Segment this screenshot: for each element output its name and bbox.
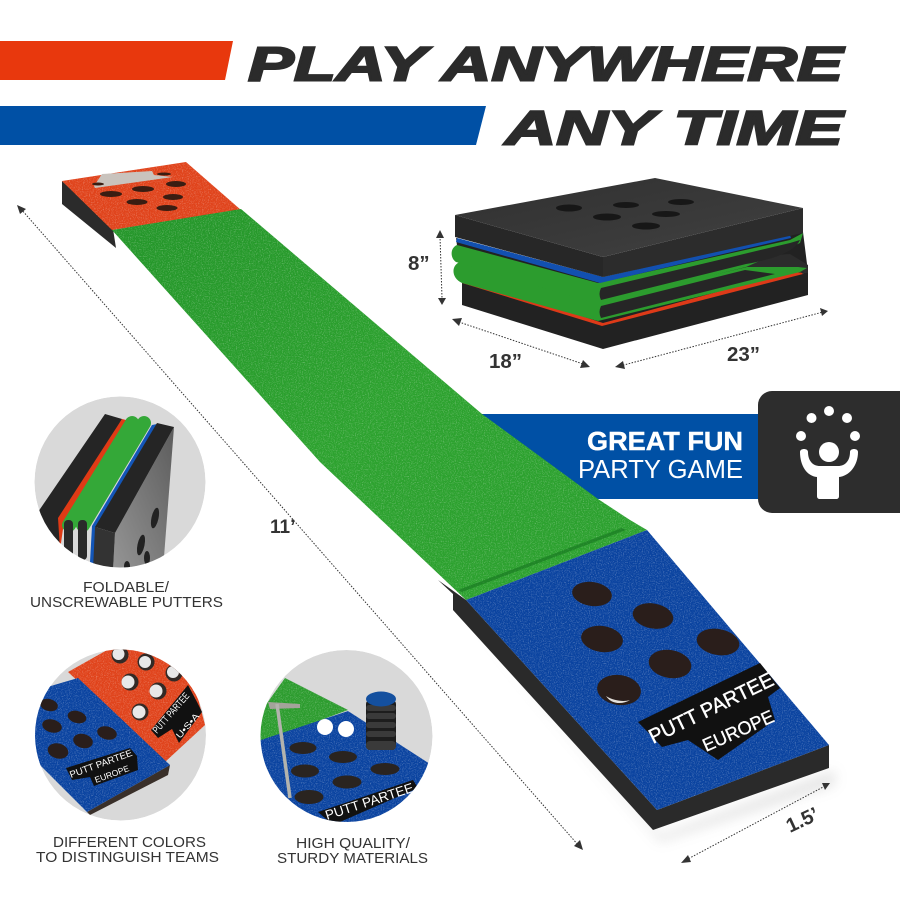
orange header bar [0,41,233,80]
circle photo: close-up with putter [255,650,436,830]
upper fold dark core [600,240,800,300]
top slab holes [556,199,694,230]
top slab surface [455,178,803,257]
dimension: 11 feet [17,205,583,850]
caption: TO DISTINGUISH TEAMS [36,850,219,866]
dimension: 1.5 feet: 1.5’ [783,803,822,838]
circle photo: red and blue ends: PUTT PARTEE [68,748,134,781]
red logo plate [151,685,202,743]
red layer [461,270,803,326]
circle photo: red and blue ends: EUROPE [93,763,131,785]
blue edge [87,765,170,815]
callout text [578,428,743,484]
caption [277,836,428,867]
fairway seam [458,528,626,592]
circle photo: red and blue ends: PUTT PARTEE [151,691,192,736]
dimension: 1.5 feet [681,783,830,863]
holes [290,742,400,804]
title line 2: ANY TIME [504,102,846,156]
top slab front [455,215,603,277]
feature: high quality [255,650,436,867]
dimension: 8 inches: 8” [408,252,430,275]
title [248,38,846,156]
feature: foldable [30,396,223,611]
dimension: 11 feet: 11’ [270,517,295,538]
black slab front [93,527,115,570]
golf balls [317,719,354,737]
blue end [466,530,829,810]
dark backing between layers [456,232,808,326]
circle photo: red and blue ends [35,650,206,820]
red end score label [94,171,173,188]
logo plate [318,780,418,825]
logo name: PUTT PARTEE [645,668,777,748]
caption [36,835,219,866]
red end holes [92,172,186,211]
feature: different colors [35,650,218,862]
logo region: EUROPE [699,706,777,756]
blue end holes [571,579,741,708]
black slab top edge [95,423,174,533]
blue logo plate [66,748,138,786]
icon: person juggling [796,406,860,499]
main putting mat [62,162,835,842]
blue end edge [453,593,829,830]
caption: DIFFERENT COLORS [53,835,206,851]
dark icon box [758,391,900,513]
mat shadow [465,615,835,842]
lower green fold [453,262,807,321]
blue banner [470,414,765,499]
gray slab face [113,427,174,570]
red end dark edge [62,181,116,248]
lower fold dark core [600,270,775,318]
white balls in holes [112,646,182,720]
blue layer [456,235,791,283]
circle photo: folded edge [34,396,206,571]
green turf [255,678,348,742]
red end [62,162,241,230]
blue holes [39,697,118,761]
dimension: 23 inches [615,308,828,369]
rear dark fold [746,254,808,273]
circle photo: close-up with putter: PUTT PARTEE [323,780,415,823]
fold ends [64,520,87,560]
red end [68,640,205,762]
blue end [20,678,170,812]
dimension: 8 inches [408,230,446,305]
slab holes [124,507,161,571]
caption: FOLDABLE/ [83,580,170,596]
blue layer [90,424,157,565]
callout text: GREAT FUN [587,428,743,456]
upper green fold [452,233,803,304]
title line 1: PLAY ANYWHERE [248,38,846,92]
lower slab [462,272,808,349]
green left dark edge [438,580,466,600]
top slab right side [603,208,803,277]
blue turf [260,711,428,822]
putter [268,702,300,798]
logo plate [638,663,780,760]
caption: UNSCREWABLE PUTTERS [30,595,223,611]
callout text: PARTY GAME [578,454,743,484]
dimension: 23 inches: 23” [727,343,760,366]
folded product [452,178,808,349]
circle photo: red and blue ends: U•S•A [174,711,201,740]
green folds [69,423,144,525]
red layer [58,419,126,550]
green fairway [112,209,647,600]
blue header bar [0,106,486,145]
caption: HIGH QUALITY/ [296,836,411,852]
caption: STURDY MATERIALS [277,851,428,867]
hole highlight [606,696,630,703]
caption [30,580,223,611]
stacked discs [366,692,396,750]
dimension: 18 inches: 18” [489,350,522,373]
callout: great fun party game [470,391,900,513]
rear black slab [38,414,122,550]
dimension: 18 inches [452,318,590,373]
